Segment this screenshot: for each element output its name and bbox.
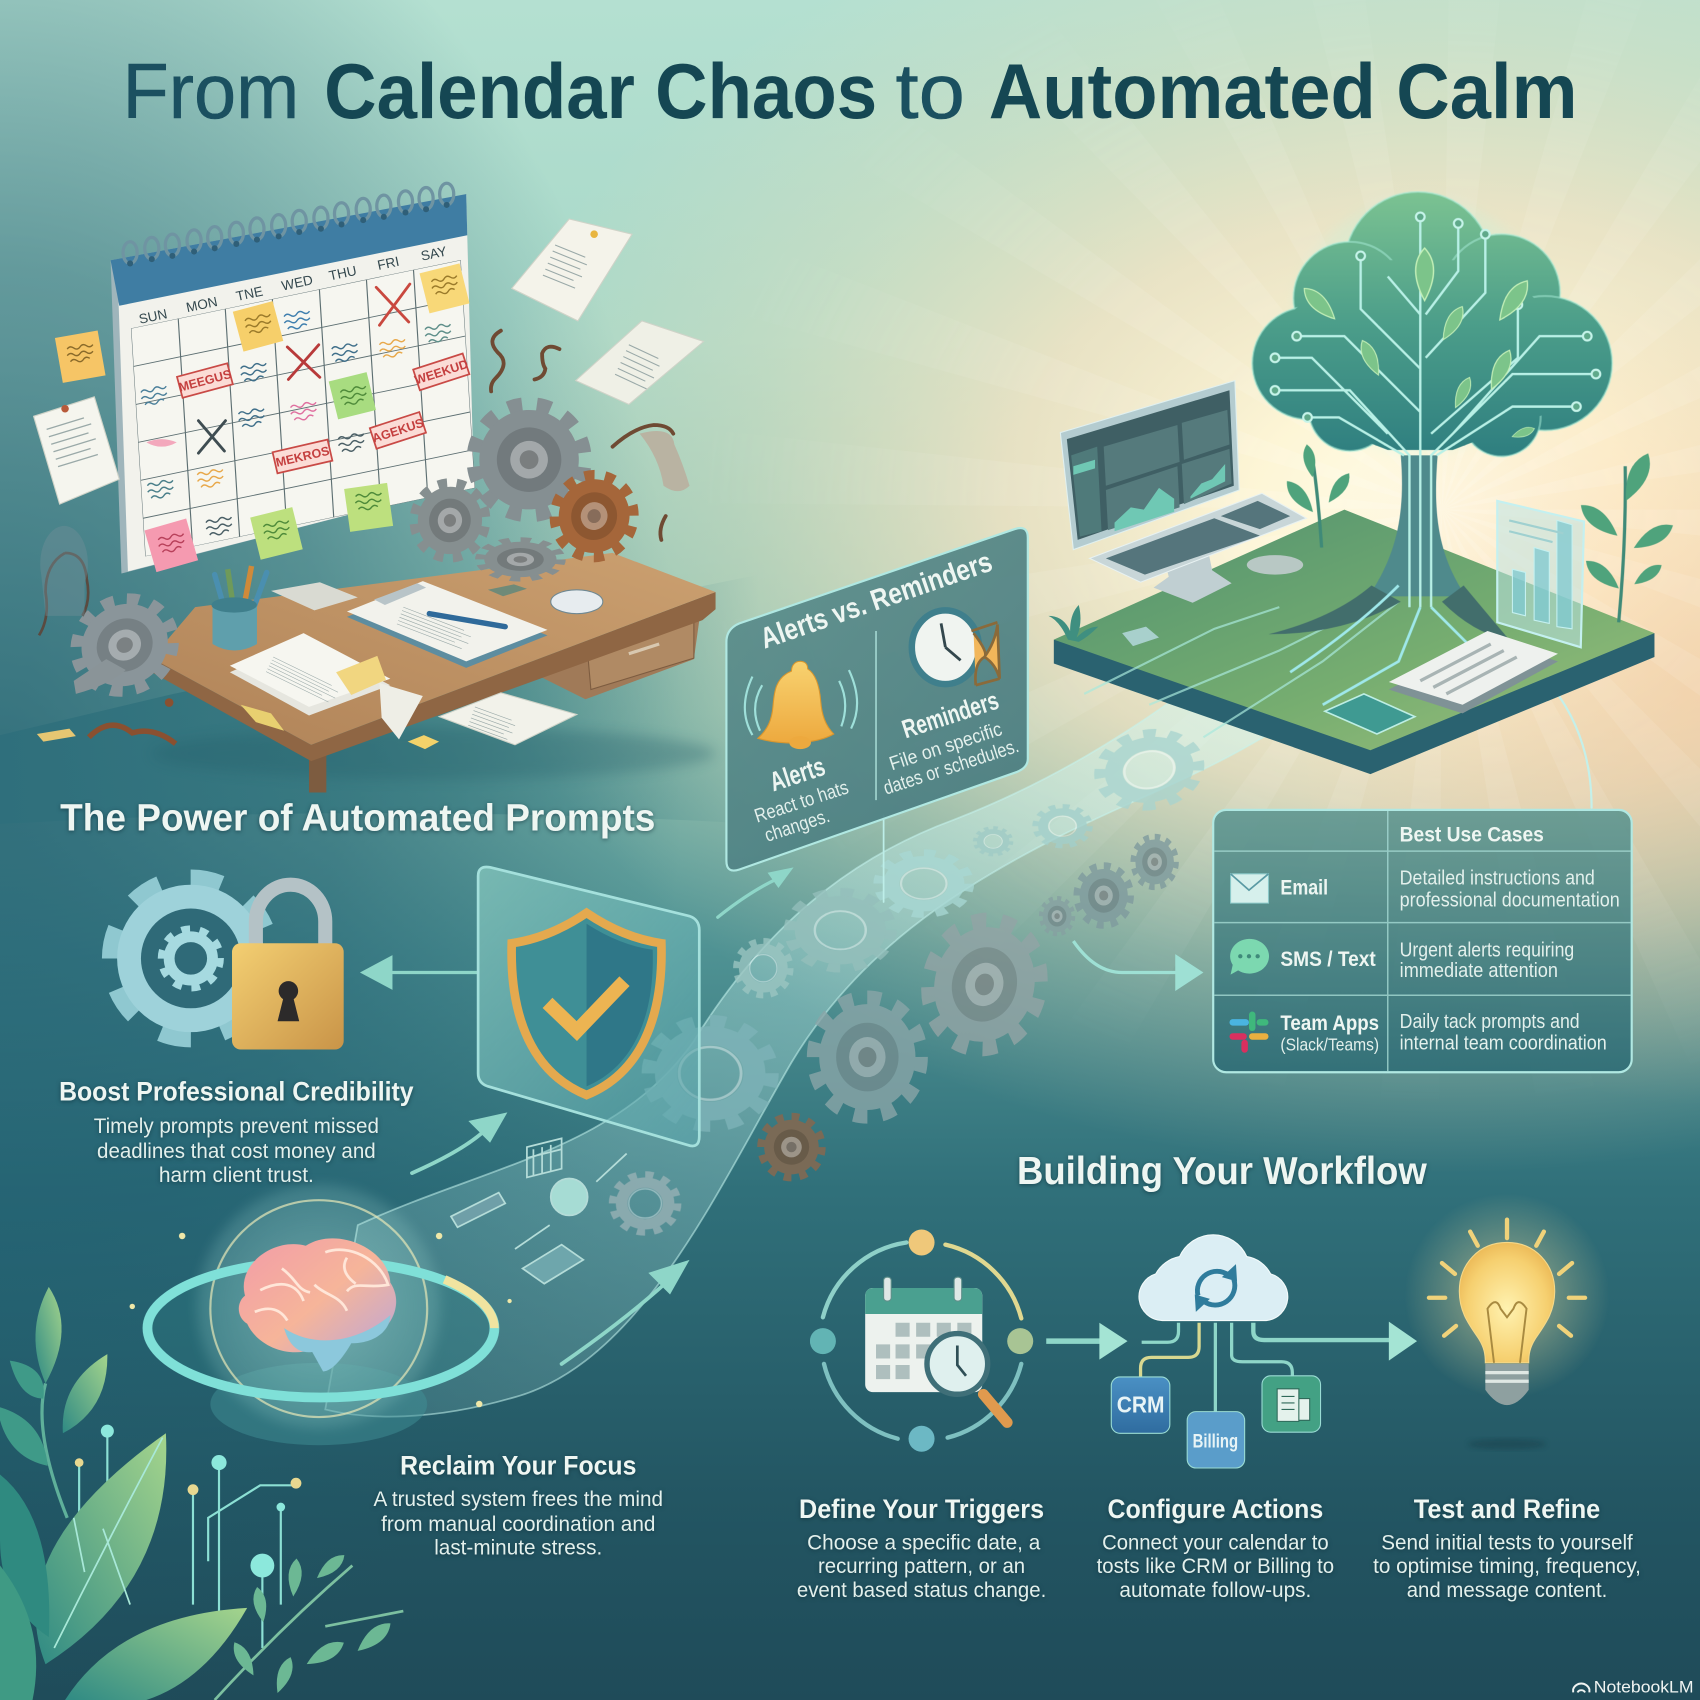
desk — [152, 553, 716, 793]
alerts text: Alerts — [766, 750, 829, 797]
title: Calendar Chaos — [324, 47, 877, 135]
text block: reclaim your focus: A trusted system frees the mind — [374, 1486, 663, 1511]
icon: cloud connected to apps: Billing — [1193, 1430, 1238, 1452]
section heading: the power of automated prompts: The Power of Automated Prompts — [60, 797, 655, 839]
title — [123, 47, 1577, 135]
text block: boost professional credibility — [59, 1075, 414, 1187]
row: team apps: internal team coordination — [1400, 1031, 1607, 1054]
row: team apps — [1233, 1010, 1607, 1055]
arrow: triggers to actions — [1046, 1323, 1128, 1360]
illustration: leaves and circuits — [0, 1287, 403, 1700]
row: sms: Urgent alerts requiring — [1400, 938, 1574, 961]
calendar crosses — [198, 284, 410, 453]
row: email — [1231, 867, 1620, 911]
text block: configure actions: automate follow-ups. — [1119, 1577, 1311, 1602]
calendar spiral binding — [123, 183, 454, 266]
floor debris — [37, 526, 189, 744]
text block: test and refine: Test and Refine — [1414, 1493, 1600, 1524]
row: sms: immediate attention — [1400, 959, 1558, 982]
text block: configure actions: Connect your calendar to — [1102, 1529, 1329, 1554]
text block: test and refine: to optimise timing, frequency, — [1373, 1553, 1641, 1578]
glass report panel — [1497, 501, 1584, 647]
row: sms: SMS / Text — [1280, 946, 1376, 971]
section heading: building your workflow: Building Your Workflow — [1017, 1150, 1427, 1193]
tree circuit nodes — [1271, 212, 1600, 422]
ribbon gears — [613, 726, 1204, 1232]
broken gears on desk — [408, 331, 690, 579]
calendar stamps: MEEGUS — [177, 367, 233, 395]
text block: define your triggers — [797, 1493, 1046, 1602]
icon: glowing lightbulb — [1404, 1193, 1610, 1450]
table header: Best Use Cases — [1400, 821, 1544, 846]
title: Automated Calm — [989, 47, 1577, 135]
calendar sticky notes — [55, 263, 469, 572]
flow arrows — [412, 672, 1592, 1364]
panel: shield glass — [478, 867, 699, 1146]
text block: test and refine: and message content. — [1407, 1577, 1607, 1602]
calendar weekday labels: MON — [185, 294, 219, 315]
notebooklm logo: NotebookLM — [1594, 1678, 1693, 1696]
reminders text — [881, 685, 1022, 800]
reminders text: File on specific — [887, 718, 1005, 775]
title: From — [123, 47, 299, 135]
floor — [0, 575, 759, 824]
row: team apps: Team Apps — [1280, 1010, 1379, 1035]
icon: clock and hourglass — [912, 610, 1000, 685]
clipboard — [1389, 631, 1558, 713]
calendar weekday labels — [137, 244, 448, 327]
tree crown — [1252, 192, 1612, 705]
icon: brain in orbit — [130, 1185, 512, 1445]
icon: trigger cycle with calendar — [810, 1229, 1033, 1452]
calendar stamps: AGEKUS — [370, 416, 425, 446]
text block: boost professional credibility: Timely prompts prevent missed — [94, 1113, 379, 1138]
tree trunk — [1368, 455, 1466, 596]
flow ribbon — [325, 662, 1325, 1417]
text block: configure actions: tosts like CRM or Billing to — [1097, 1553, 1334, 1578]
text block: define your triggers: recurring pattern, or an — [818, 1553, 1025, 1578]
title: to — [896, 47, 965, 135]
calendar stamps: WEEKUD — [413, 357, 470, 387]
reminders text: dates or schedules. — [881, 735, 1022, 800]
text block: define your triggers: event based status change. — [797, 1577, 1046, 1602]
text block: reclaim your focus: last-minute stress. — [434, 1535, 602, 1560]
icon: cloud connected to apps: CRM — [1117, 1392, 1164, 1418]
calendar weekday labels: SUN — [137, 306, 169, 327]
illustration: digital tree island — [1048, 192, 1677, 774]
calendar stamps: MEKROS — [274, 444, 331, 470]
alerts text: changes. — [762, 805, 833, 847]
text block: boost professional credibility: harm client trust. — [159, 1162, 314, 1187]
panel: alerts vs reminders — [726, 528, 1028, 871]
text block: reclaim your focus: from manual coordination and — [381, 1511, 655, 1536]
text block: define your triggers: Define Your Triggers — [799, 1493, 1044, 1524]
text block: configure actions: Configure Actions — [1107, 1493, 1323, 1524]
alerts text — [752, 750, 852, 847]
calendar scribbled entries — [139, 310, 453, 537]
calendar weekday labels: SAY — [419, 244, 448, 264]
text block: test and refine: Send initial tests to yourself — [1381, 1529, 1634, 1554]
text block: boost professional credibility: deadlines that cost money and — [97, 1138, 376, 1163]
row: email: Detailed instructions and — [1400, 867, 1595, 890]
calendar weekday labels: WED — [280, 272, 314, 294]
desk papers and clipboard — [230, 581, 603, 739]
arrow: ribbon to table — [1073, 941, 1203, 991]
reminders text: Reminders — [898, 685, 1002, 744]
row: email: professional documentation — [1400, 888, 1620, 911]
calendar weekday labels: THU — [328, 263, 358, 283]
row: team apps: Daily tack prompts and — [1400, 1010, 1580, 1033]
arrow: shield to padlock — [360, 955, 477, 990]
row: email: Email — [1280, 874, 1328, 899]
loose papers — [34, 219, 704, 749]
alerts text: React to hats — [752, 776, 852, 828]
table: channels and best use cases — [1213, 810, 1632, 1072]
text block: boost professional credibility: Boost Professional Credibility — [59, 1075, 414, 1106]
icon: shield with check — [512, 913, 661, 1095]
calendar — [55, 183, 475, 574]
plants — [1282, 443, 1677, 622]
text block: test and refine — [1373, 1493, 1641, 1602]
row: team apps: (Slack/Teams) — [1280, 1035, 1379, 1055]
ribbon data icons — [451, 1138, 627, 1284]
panel heading: Alerts vs. Reminders — [756, 546, 996, 655]
calendar stamps — [176, 353, 471, 473]
text block: reclaim your focus: Reclaim Your Focus — [400, 1449, 636, 1480]
icon: cloud connected to apps — [1111, 1235, 1417, 1468]
island base — [1048, 510, 1654, 774]
icon: gear and padlock — [113, 880, 344, 1049]
tree circuit branches — [1279, 222, 1592, 705]
computer monitor — [1060, 381, 1306, 603]
calendar weekday labels: TNE — [235, 284, 264, 304]
text block: configure actions — [1097, 1493, 1334, 1602]
row: sms — [1230, 938, 1574, 982]
text block: reclaim your focus — [374, 1449, 663, 1560]
tree leaves — [1299, 248, 1536, 440]
text block: define your triggers: Choose a specific date, a — [807, 1529, 1041, 1554]
pen cup — [211, 566, 267, 651]
calendar weekday labels: FRI — [376, 254, 401, 273]
icon: bell — [745, 661, 857, 749]
